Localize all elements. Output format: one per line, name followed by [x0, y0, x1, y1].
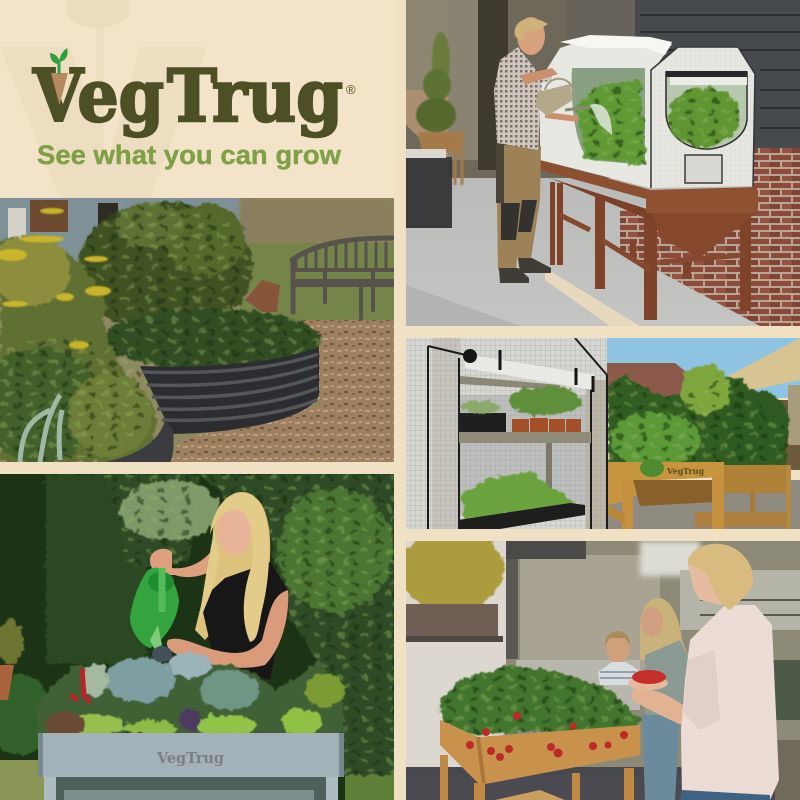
poly tunnel cover	[540, 35, 755, 188]
front wooden planter	[608, 462, 724, 529]
pink sweater	[681, 605, 779, 800]
red chard stems	[70, 668, 90, 703]
seedlings lower tray	[460, 472, 575, 520]
hair back	[195, 495, 270, 642]
sky	[606, 338, 800, 398]
registered mark: ®	[346, 82, 356, 97]
strawberry bowl	[628, 670, 668, 690]
grey VegTrug planter	[38, 733, 344, 800]
cover roll	[560, 35, 672, 55]
head	[517, 17, 545, 55]
terracotta pots	[512, 418, 581, 432]
face	[217, 508, 251, 556]
deck	[406, 767, 800, 800]
panel: family with strawberries photo	[400, 528, 800, 800]
strawberries on planter	[466, 712, 628, 761]
panel: girl watering photo	[0, 474, 394, 800]
lower vent	[685, 155, 722, 183]
forearms	[520, 68, 578, 122]
back wooden planter	[695, 465, 791, 529]
overhanging leaf	[640, 459, 664, 477]
jeans	[680, 790, 770, 800]
end window	[666, 72, 747, 149]
planter brand text: VegTrug	[156, 749, 224, 767]
vegetable plants	[35, 653, 345, 738]
wood chip ground	[170, 320, 394, 462]
black top	[203, 562, 288, 680]
garden foliage	[608, 365, 790, 470]
man	[494, 17, 578, 283]
legs	[550, 182, 751, 320]
side window frame	[572, 68, 645, 165]
house roof right	[713, 338, 800, 470]
strawberry foliage	[438, 665, 640, 745]
icon: green watering can	[130, 568, 179, 650]
upper shelf bar	[460, 376, 560, 390]
neighbour roof	[607, 363, 720, 398]
panel: greenhouse and raised planters photo	[406, 338, 800, 529]
woman	[628, 544, 779, 800]
check shirt	[494, 47, 542, 150]
wooden shelf	[459, 432, 591, 443]
brick wall	[752, 148, 800, 312]
lower tray	[458, 503, 585, 529]
white wall	[406, 541, 516, 776]
water splash	[152, 646, 172, 662]
watering can	[535, 79, 590, 116]
greenhouse	[406, 338, 607, 529]
bench	[292, 238, 394, 318]
logo wordmark: Trug	[167, 53, 343, 138]
topiary	[416, 32, 465, 185]
forearm	[632, 689, 690, 726]
panel: man watering covered planter photo	[406, 0, 800, 326]
strawberry foliage	[104, 309, 320, 369]
boy	[598, 631, 638, 685]
forearm and upper arm	[167, 590, 288, 668]
tagline: See what you can grow	[37, 140, 342, 170]
logo wordmark: Veg	[32, 53, 164, 138]
back wall and door	[406, 0, 638, 178]
hair front	[210, 492, 269, 642]
girl	[150, 492, 288, 680]
glass doors	[506, 541, 800, 776]
wall planter	[406, 604, 503, 642]
shed	[0, 198, 240, 298]
distant hedge and lawn	[240, 198, 394, 321]
wooden planter	[440, 720, 640, 800]
hair	[688, 544, 753, 610]
trousers	[496, 145, 541, 270]
leek stems	[20, 395, 62, 462]
yellow flower heads	[0, 208, 111, 349]
face	[688, 565, 722, 605]
boots	[499, 268, 529, 283]
background shrubs	[77, 202, 253, 334]
panel: metal raised bed photo	[0, 198, 394, 463]
tomato plants in side window	[576, 80, 646, 165]
tall hedge	[46, 474, 146, 664]
storage box	[406, 149, 452, 228]
watering can spray	[590, 104, 612, 135]
lawn and left shrubs	[0, 620, 394, 800]
right tree foliage	[105, 474, 394, 775]
planter wood	[540, 160, 758, 320]
paving and wall below	[607, 480, 800, 529]
log pile	[245, 280, 280, 312]
panel: logo on wood	[0, 0, 394, 198]
bamboo	[400, 528, 504, 612]
small metal bed	[105, 420, 174, 462]
planter brand text: VegTrug	[666, 466, 705, 476]
arm raised	[150, 549, 213, 577]
sun patch	[545, 268, 640, 326]
vertical column gap	[394, 0, 406, 800]
seed tray upper	[458, 413, 506, 432]
paving shade	[406, 285, 520, 326]
dark siding wall	[635, 0, 800, 150]
girl in glass	[640, 598, 690, 800]
pot seedlings	[460, 387, 581, 415]
rolled cover	[465, 354, 595, 390]
yellow fennel and leek foliage	[0, 235, 156, 463]
logo wordmark	[32, 53, 343, 138]
icon: seedling and soil wedge	[50, 48, 68, 105]
tomato plants in end window	[668, 87, 740, 147]
metal raised bed	[140, 347, 319, 434]
